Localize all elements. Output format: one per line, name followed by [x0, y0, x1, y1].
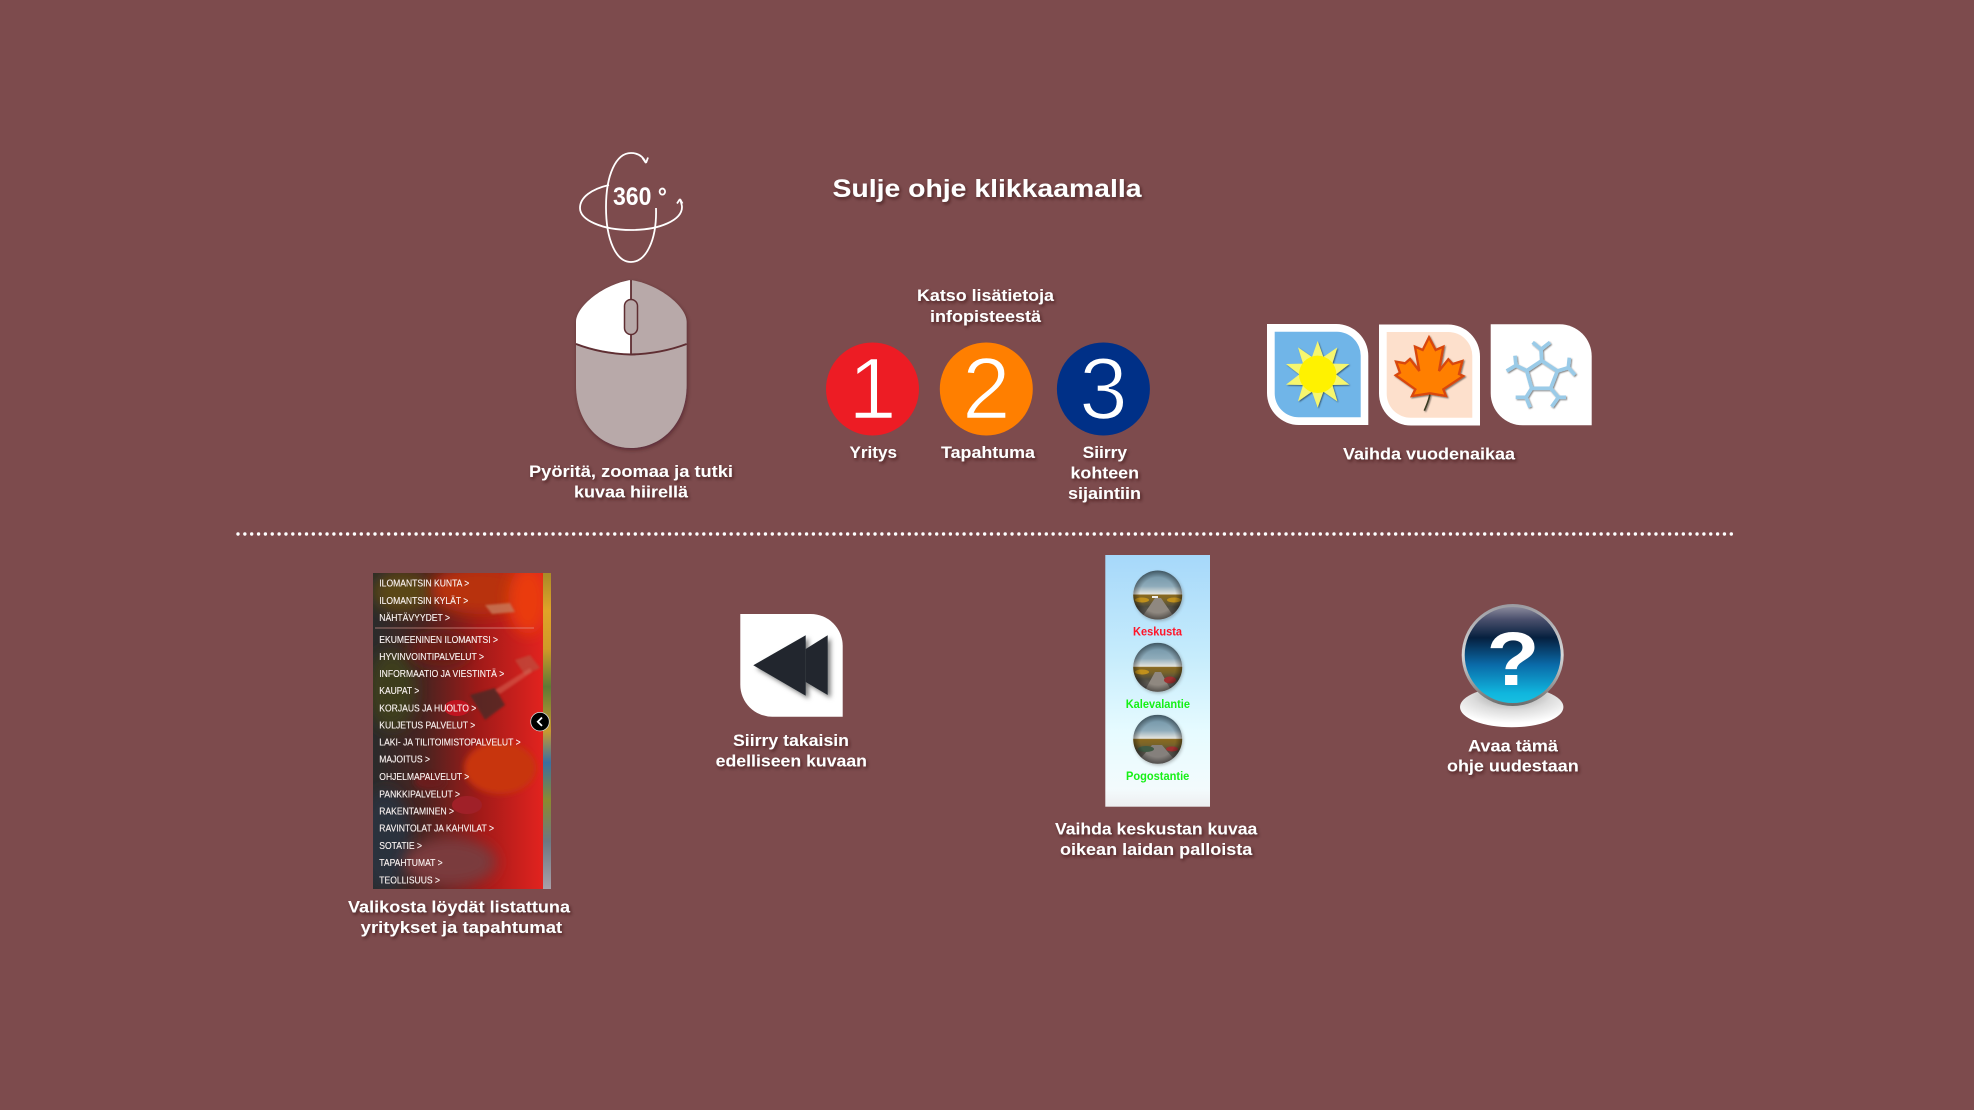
marker: 3 kohteen sijainti: [1057, 340, 1150, 438]
sphere: Pogostantie: [1126, 715, 1189, 783]
menu items: ILOMANTSIN KUNTA >: [379, 578, 470, 590]
caption: rewind: edelliseen kuvaan: [716, 751, 867, 770]
panel: location spheres: [1105, 555, 1210, 807]
label: Siirry kohteen sijaintiin: sijaintiin: [1068, 484, 1141, 503]
caption: spheres: Vaihda keskustan kuvaa: [1055, 820, 1258, 839]
menu items: MAJOITUS >: [379, 755, 430, 766]
caption: menu: [348, 898, 571, 937]
caption: spheres: [1055, 820, 1258, 859]
caption: mouse: kuvaa hiirellä: [574, 482, 689, 502]
caption: rewind: [716, 731, 867, 770]
sphere: Pogostantie: Pogostantie: [1126, 771, 1189, 783]
caption: seasons: Vaihda vuodenaikaa: [1343, 444, 1516, 464]
title: Sulje ohje klikkaamalla: [832, 175, 1143, 203]
label: Siirry kohteen sijaintiin: kohteen: [1070, 464, 1139, 482]
menu items: ILOMANTSIN KYLÄT >: [379, 596, 469, 607]
label: Yritys: Yritys: [850, 443, 897, 462]
sphere: Kalevalantie: [1126, 643, 1190, 711]
menu items: KAUPAT >: [379, 686, 420, 697]
menu items: OHJELMAPALVELUT >: [379, 772, 470, 783]
menu items: INFORMAATIO JA VIESTINTÄ >: [379, 669, 505, 680]
caption: help: [1447, 736, 1579, 776]
infographic: help overlay: [236, 152, 1733, 940]
caption: help: ohje uudestaan: [1447, 756, 1579, 776]
menu items: EKUMEENINEN ILOMANTSI >: [379, 635, 498, 646]
icon: 360 degree rotation: [580, 153, 682, 262]
caption: menu: Valikosta löydät listattuna: [348, 898, 571, 917]
sphere: Keskusta: Keskusta: [1133, 627, 1183, 639]
label: Tapahtuma: Tapahtuma: [941, 443, 1036, 462]
menu items: TAPAHTUMAT >: [379, 858, 443, 869]
marker: 2 Tapahtuma: [940, 340, 1033, 438]
caption: help: Avaa tämä: [1468, 736, 1559, 755]
icon: autumn tile: [1379, 324, 1480, 426]
menu items: SOTATIE >: [379, 841, 422, 852]
menu items: RAKENTAMINEN >: [379, 806, 454, 817]
heading: info points: infopisteestä: [930, 307, 1042, 326]
marker: 3 kohteen sijainti: 3: [1079, 340, 1128, 438]
icon: summer tile: [1267, 324, 1368, 425]
marker: 1 Yritys: [826, 340, 919, 438]
panel: side menu: [359, 566, 551, 890]
caption: mouse: [529, 462, 733, 502]
marker: 1 Yritys: 1: [848, 340, 897, 438]
label: Siirry kohteen sijaintiin: [1068, 443, 1141, 503]
icon: rewind tile: [740, 614, 843, 717]
menu items: PANKKIPALVELUT >: [379, 789, 460, 800]
heading: info points: Katso lisätietoja: [917, 286, 1055, 305]
menu items: KULJETUS PALVELUT >: [379, 720, 476, 731]
icon: winter tile: [1491, 324, 1592, 425]
menu items: [379, 578, 521, 886]
menu items: LAKI- JA TILITOIMISTOPALVELUT >: [379, 738, 521, 749]
heading: info points: [917, 286, 1055, 326]
icon: help ball: [1460, 604, 1564, 727]
caption: rewind: Siirry takaisin: [733, 731, 849, 750]
icon: help ball: ?: [1486, 617, 1540, 702]
menu items: KORJAUS JA HUOLTO >: [379, 703, 477, 714]
sphere: Kalevalantie: Kalevalantie: [1126, 699, 1190, 711]
caption: mouse: Pyöritä, zoomaa ja tutki: [529, 462, 733, 481]
icon: menu collapse button: [531, 712, 549, 731]
caption: menu: yritykset ja tapahtumat: [361, 918, 563, 937]
icon: mouse: [576, 280, 687, 448]
caption: spheres: oikean laidan palloista: [1060, 840, 1253, 859]
menu items: NÄHTÄVYYDET >: [379, 613, 450, 624]
menu items: RAVINTOLAT JA KAHVILAT >: [379, 824, 494, 835]
sphere: Keskusta: [1133, 570, 1183, 639]
menu items: HYVINVOINTIPALVELUT >: [379, 652, 484, 663]
menu items: TEOLLISUUS >: [379, 875, 440, 886]
marker: 2 Tapahtuma: 2: [962, 340, 1010, 438]
label: Siirry kohteen sijaintiin: Siirry: [1083, 443, 1128, 462]
icon: 360 degree rotation: 360 °: [613, 183, 667, 211]
